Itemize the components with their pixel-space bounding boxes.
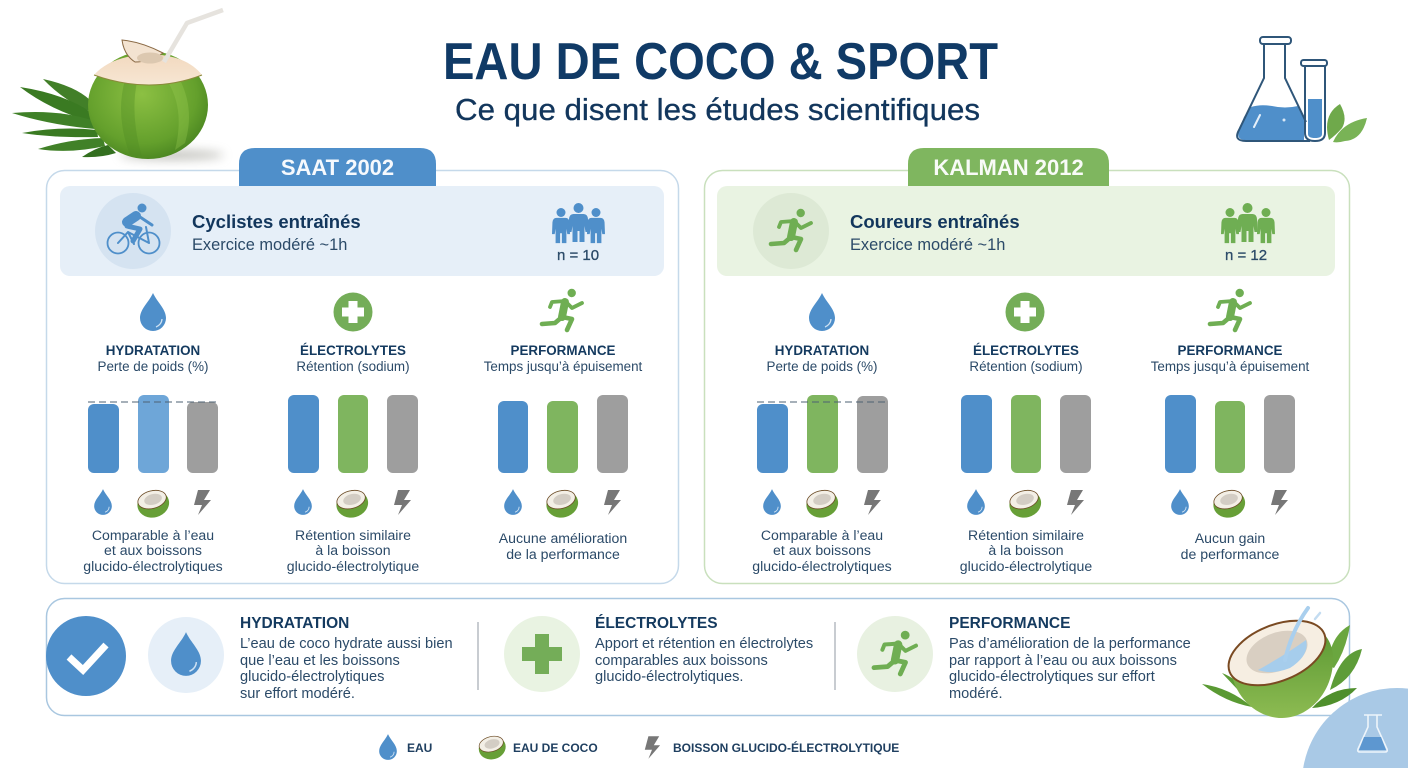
metric: performance: PERFORMANCE xyxy=(1178,343,1283,358)
metric: hydratation: HYDRATATION xyxy=(775,343,869,358)
metric: hydratation: glucido-électrolytiques xyxy=(83,558,223,574)
conclusion: électrolytes: ÉLECTROLYTES xyxy=(595,615,718,632)
decorative corner circle with flask xyxy=(1303,688,1408,768)
legend item: boisson xyxy=(645,736,899,759)
conclusion: hydratation: sur effort modéré. xyxy=(240,686,355,702)
illustration: green coconut with straw xyxy=(12,10,224,160)
metric: électrolytes xyxy=(960,292,1092,574)
metric: électrolytes: glucido-électrolytique xyxy=(287,558,419,574)
metric: hydratation: Comparable à l’eau xyxy=(761,527,883,543)
metric: électrolytes: à la boisson xyxy=(315,542,391,558)
metric: performance: Aucun gain xyxy=(1195,530,1265,546)
icon: participants xyxy=(1221,203,1275,243)
conclusion: hydratation: HYDRATATION xyxy=(240,615,349,632)
legend item: boisson: BOISSON GLUCIDO-ÉLECTROLYTIQUE xyxy=(673,740,899,755)
metric: électrolytes: Rétention (sodium) xyxy=(969,359,1083,374)
icon: cyclist xyxy=(108,204,160,254)
metric: hydratation: glucido-électrolytiques xyxy=(752,558,892,574)
study header band: Cyclistes entraînés xyxy=(192,211,361,232)
conclusion: hydratation: L’eau de coco hydrate aussi bien xyxy=(240,636,453,652)
metric: performance: Temps jusqu’à épuisement xyxy=(1151,359,1310,374)
metric: hydratation: Perte de poids (%) xyxy=(98,359,208,374)
metric: hydratation: et aux boissons xyxy=(773,542,871,558)
metric: hydratation: HYDRATATION xyxy=(106,343,200,358)
metric: hydratation xyxy=(83,293,223,574)
panel: Saat 2002 xyxy=(46,148,678,584)
study header band xyxy=(717,186,1335,276)
conclusion: performance: glucido-électrolytiques sur effort xyxy=(949,669,1155,685)
tab: Kalman 2012: KALMAN 2012 xyxy=(933,155,1084,180)
conclusion: hydratation: glucido-électrolytiques xyxy=(240,669,384,685)
subtitle: Ce que disent les études scientifiques xyxy=(455,92,980,127)
icon: check badge xyxy=(46,616,126,696)
conclusion: performance: modéré. xyxy=(949,686,1003,702)
study header band: n = 10 xyxy=(557,247,599,264)
legend item: eau de coco xyxy=(476,733,598,762)
metric: hydratation: Comparable à l’eau xyxy=(92,527,214,543)
panel: conclusions xyxy=(46,598,1350,716)
tab: Kalman 2012 xyxy=(908,148,1109,186)
metric: électrolytes: à la boisson xyxy=(988,542,1064,558)
metric: performance: Temps jusqu’à épuisement xyxy=(484,359,643,374)
icon: participants xyxy=(552,203,605,243)
conclusion: performance: par rapport à l’eau ou aux boissons xyxy=(949,653,1177,669)
metric: électrolytes: glucido-électrolytique xyxy=(960,558,1092,574)
metric: électrolytes: ÉLECTROLYTES xyxy=(973,343,1079,358)
metric: performance xyxy=(1151,289,1310,562)
metric: électrolytes xyxy=(287,292,419,574)
conclusion: électrolytes: glucido-électrolytiques. xyxy=(595,669,743,685)
study header band xyxy=(60,186,664,276)
metric: performance: de performance xyxy=(1181,546,1280,562)
title: EAU DE COCO & SPORT xyxy=(443,33,998,91)
study header band: n = 12 xyxy=(1225,247,1267,264)
legend item: eau: EAU xyxy=(407,741,432,755)
metric: performance xyxy=(484,289,643,562)
conclusion: électrolytes: comparables aux boissons xyxy=(595,653,768,669)
metric: électrolytes: Rétention (sodium) xyxy=(296,359,410,374)
illustration: halved coconut with splash xyxy=(1202,608,1362,718)
legend xyxy=(379,733,899,762)
metric: performance: PERFORMANCE xyxy=(511,343,616,358)
conclusion: performance: Pas d’amélioration de la performance xyxy=(949,636,1191,652)
legend item: eau xyxy=(379,734,432,760)
metric: performance: Aucune amélioration xyxy=(499,530,627,546)
tab: Saat 2002 xyxy=(239,148,436,186)
metric: hydratation xyxy=(752,293,892,574)
conclusion: électrolytes: Apport et rétention en électrolytes xyxy=(595,636,813,652)
study header band: Coureurs entraînés xyxy=(850,211,1020,232)
legend item: eau de coco: EAU DE COCO xyxy=(513,741,598,755)
conclusion: électrolytes xyxy=(504,615,813,692)
metric: électrolytes: ÉLECTROLYTES xyxy=(300,343,406,358)
panel: Kalman 2012 xyxy=(704,148,1350,584)
conclusion: hydratation xyxy=(148,615,453,702)
metric: hydratation: et aux boissons xyxy=(104,542,202,558)
conclusion: hydratation: que l’eau et les boissons xyxy=(240,653,400,669)
metric: hydratation: Perte de poids (%) xyxy=(767,359,877,374)
metric: performance: de la performance xyxy=(506,546,620,562)
study header band: Exercice modéré ~1h xyxy=(192,236,347,254)
study header band: Exercice modéré ~1h xyxy=(850,236,1005,254)
metric: électrolytes: Rétention similaire xyxy=(968,527,1084,543)
conclusion: performance: PERFORMANCE xyxy=(949,615,1070,632)
tab: Saat 2002: SAAT 2002 xyxy=(281,155,394,180)
conclusion: performance xyxy=(857,615,1191,702)
illustration: flask and test tube xyxy=(1237,37,1367,142)
metric: électrolytes: Rétention similaire xyxy=(295,527,411,543)
